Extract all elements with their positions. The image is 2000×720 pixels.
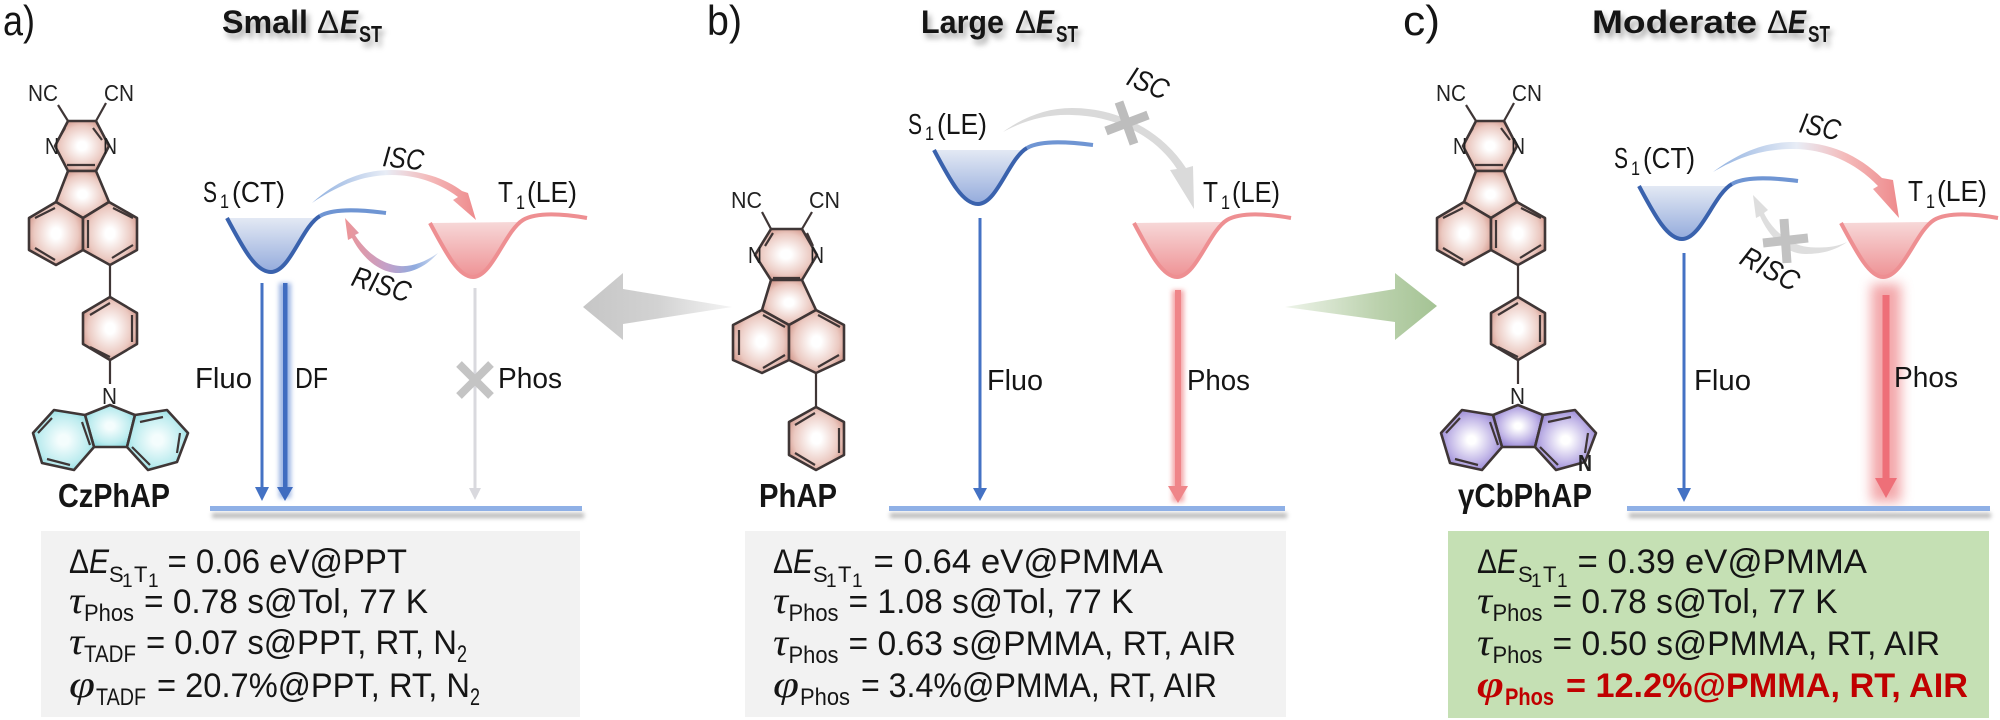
line: TADF quantum yield: 2 — [470, 684, 480, 711]
blocked ISC cross — [1106, 102, 1148, 144]
text: Phos: Phos — [1894, 362, 1958, 394]
heading: large gap: E — [1036, 4, 1055, 40]
heading: large gap: Large — [921, 4, 1004, 40]
line: TADF lifetime — [69, 621, 467, 668]
T1 well — [1134, 214, 1291, 277]
line: lifetime in PMMA: τ — [773, 622, 790, 664]
text: RISC: RISC — [1735, 241, 1805, 299]
line: energy gap: 1 — [148, 571, 159, 592]
delayed fluorescence arrow — [277, 283, 293, 501]
line: energy gap: 1 — [1557, 571, 1568, 592]
line: lifetime in PMMA: Phos — [788, 642, 838, 669]
molecule: gammaCbPhAP: CN — [1512, 80, 1542, 106]
line: lifetime in PMMA: Phos — [1492, 642, 1542, 669]
molecule: PhAP: CN — [809, 187, 840, 213]
heading: small gap — [222, 4, 382, 47]
heading: moderate gap: ST — [1808, 21, 1830, 47]
line: energy gap: 1 — [122, 571, 133, 592]
blocked ISC arrow — [1003, 108, 1194, 209]
text: Fluo: Fluo — [195, 363, 252, 395]
molecule: gammaCbPhAP: N — [1453, 133, 1467, 159]
fluorescence arrow — [1677, 253, 1691, 502]
line: TADF lifetime: TADF — [84, 641, 136, 668]
RISC arrow — [345, 218, 438, 273]
text: RISC: RISC — [348, 261, 416, 310]
molecule: CzPhAP — [28, 80, 188, 470]
molecule: gammaCbPhAP: NC — [1436, 80, 1466, 106]
fluorescence arrow — [973, 218, 987, 501]
text: T1(LE) — [1203, 177, 1280, 214]
molecule: CzPhAP: N — [45, 133, 59, 159]
molecule name: CzPhAP: CzPhAP — [58, 477, 170, 514]
line: energy gap — [773, 543, 1163, 592]
heading: moderate gap — [1592, 4, 1830, 47]
line: lifetime in toluene: Phos — [1492, 600, 1542, 627]
line: energy gap: 1 — [1531, 571, 1542, 592]
molecule: gammaCbPhAP — [1436, 80, 1596, 476]
arrow: grey, to panel a — [583, 273, 732, 340]
line: energy gap: T — [838, 562, 851, 587]
molecule name: gammaCbPhAP: γCbPhAP — [1458, 477, 1592, 514]
text: T1(LE): T — [1908, 176, 1923, 208]
heading: moderate gap: Δ — [1767, 4, 1788, 40]
line: energy gap: 1 — [826, 571, 837, 592]
line: quantum yield, highlighted: Phos — [1505, 684, 1554, 711]
text: S1(CT) — [1614, 143, 1695, 180]
ISC arrow — [1713, 142, 1899, 218]
heading: moderate gap: Moderate — [1592, 4, 1757, 40]
text: S1(CT): (CT) — [232, 177, 285, 209]
line: energy gap: E — [793, 543, 813, 581]
line: lifetime in toluene: τ — [773, 580, 790, 622]
ISC arrow — [312, 170, 476, 220]
line: energy gap: Δ — [1477, 543, 1497, 581]
line: energy gap: 1 — [852, 571, 863, 592]
text: S1(LE): 1 — [925, 124, 934, 145]
line: quantum yield, highlighted — [1477, 664, 1968, 711]
data panel c — [1448, 531, 1989, 718]
heading: large gap — [921, 4, 1078, 47]
line: TADF quantum yield: TADF — [96, 684, 146, 711]
text: T1(LE): (LE) — [1232, 177, 1280, 209]
arrow: green, to panel c — [1285, 273, 1437, 340]
line: TADF quantum yield — [69, 664, 480, 711]
text: DF: DF — [295, 363, 328, 395]
line: energy gap: Δ — [69, 543, 89, 581]
text: T1(LE) — [498, 177, 577, 214]
molecule: CzPhAP: N — [102, 383, 117, 409]
data panel a — [41, 531, 580, 717]
text: S1(CT): (CT) — [1643, 143, 1695, 175]
line: phosphorescence lifetime: = 0.78 s@Tol, 77 K — [144, 583, 428, 621]
line: lifetime in PMMA: τ — [1477, 622, 1494, 664]
line: energy gap: E — [1497, 543, 1517, 581]
text: S1(LE): S — [908, 109, 922, 141]
line: quantum yield: Phos — [800, 684, 850, 711]
text: ISC: ISC — [381, 141, 426, 177]
panel a: energy diagram — [195, 141, 587, 518]
line: quantum yield: φ — [773, 664, 799, 706]
phosphorescence arrow — [1871, 284, 1901, 502]
text: ISC: ISC — [1122, 61, 1174, 107]
heading: small gap: E — [340, 4, 359, 40]
line: lifetime in toluene: = 0.78 s@Tol, 77 K — [1552, 583, 1838, 621]
T1 well — [1841, 214, 1998, 277]
data panel b — [745, 531, 1286, 717]
S1 well — [227, 210, 386, 272]
phosphorescence arrow — [1168, 290, 1188, 503]
line: quantum yield — [773, 664, 1217, 711]
heading: moderate gap: E — [1788, 4, 1807, 40]
text: Phos: Phos — [498, 363, 562, 395]
line: TADF lifetime: 2 — [457, 641, 467, 668]
line: phosphorescence lifetime — [69, 580, 428, 627]
molecule: gammaCbPhAP: N — [1578, 450, 1592, 476]
molecule: CzPhAP: CN — [104, 80, 134, 106]
ground level — [889, 506, 1287, 518]
ground level — [210, 506, 584, 518]
line: TADF lifetime: = 0.07 s@PPT, RT, N — [146, 624, 457, 662]
molecule: CzPhAP: N — [103, 133, 117, 159]
line: energy gap: = 0.64 eV@PMMA — [874, 543, 1163, 581]
text: Phos: Phos — [1187, 365, 1250, 397]
molecule: gammaCbPhAP: N — [1511, 133, 1525, 159]
text: S1(CT): 1 — [1631, 159, 1640, 180]
text: Fluo: Fluo — [987, 365, 1043, 397]
text: S1(LE): (LE) — [937, 109, 987, 141]
heading: large gap: ST — [1056, 21, 1078, 47]
line: energy gap: = 0.06 eV@PPT — [168, 543, 407, 581]
molecule: gammaCbPhAP: N — [1510, 383, 1525, 409]
line: energy gap: = 0.39 eV@PMMA — [1578, 543, 1867, 581]
molecule name: PhAP: PhAP — [759, 477, 837, 514]
text: T1(LE): 1 — [1926, 192, 1935, 213]
line: lifetime in PMMA: = 0.63 s@PMMA, RT, AIR — [848, 625, 1236, 663]
text: S1(CT): S — [1614, 143, 1628, 175]
text: T1(LE): (LE) — [1937, 176, 1987, 208]
line: energy gap — [69, 543, 407, 592]
line: energy gap: E — [89, 543, 109, 581]
molecule: PhAP: N — [748, 242, 762, 268]
line: energy gap: S — [813, 562, 828, 587]
S1 well — [934, 142, 1093, 204]
blocked RISC cross — [1763, 219, 1808, 263]
heading: small gap: ST — [359, 21, 382, 47]
line: lifetime in PMMA — [1477, 622, 1940, 669]
text: T1(LE): T — [498, 177, 513, 209]
text: T1(LE): 1 — [516, 193, 525, 214]
line: energy gap — [1477, 543, 1867, 592]
line: phosphorescence lifetime: Phos — [84, 600, 134, 627]
panel c: energy diagram — [1614, 108, 1998, 518]
heading: large gap: Δ — [1015, 4, 1036, 40]
T1 well — [430, 214, 587, 277]
line: quantum yield: = 3.4%@PMMA, RT, AIR — [861, 667, 1217, 705]
line: quantum yield, highlighted: φ — [1477, 664, 1504, 706]
fluorescence arrow — [255, 283, 269, 501]
line: energy gap: T — [1543, 562, 1556, 587]
line: lifetime in toluene: τ — [1477, 580, 1494, 622]
text: ISC: ISC — [1797, 108, 1844, 148]
line: TADF quantum yield: φ — [69, 664, 95, 706]
line: TADF lifetime: τ — [69, 621, 86, 663]
blocked RISC arrow — [1753, 195, 1847, 254]
text: S1(CT): 1 — [220, 192, 229, 213]
panel b: energy diagram — [889, 61, 1291, 518]
text: T1(LE): T — [1203, 177, 1218, 209]
line: lifetime in PMMA — [773, 622, 1236, 669]
line: lifetime in toluene: Phos — [788, 600, 838, 627]
line: energy gap: S — [109, 562, 124, 587]
text: T1(LE): 1 — [1221, 193, 1230, 214]
heading: small gap: Δ — [317, 4, 339, 40]
text: Fluo: Fluo — [1694, 365, 1751, 397]
suppressed phosphorescence arrow — [459, 288, 491, 500]
line: lifetime in toluene: = 1.08 s@Tol, 77 K — [848, 583, 1134, 621]
text: T1(LE): (LE) — [527, 177, 577, 209]
line: lifetime in PMMA: = 0.50 s@PMMA, RT, AIR — [1552, 625, 1940, 663]
ground level — [1627, 506, 1991, 518]
text: S1(CT) — [203, 177, 285, 213]
text: T1(LE) — [1908, 176, 1987, 213]
text: S1(LE) — [908, 109, 987, 145]
line: energy gap: Δ — [773, 543, 793, 581]
line: energy gap: T — [134, 562, 147, 587]
S1 well — [1639, 178, 1798, 239]
line: quantum yield, highlighted: = 12.2%@PMMA, RT, AIR — [1566, 667, 1968, 705]
line: TADF quantum yield: = 20.7%@PPT, RT, N — [157, 667, 470, 705]
heading: small gap: Small — [222, 4, 308, 40]
molecule: PhAP: N — [810, 242, 824, 268]
line: lifetime in toluene — [773, 580, 1134, 627]
line: energy gap: S — [1518, 562, 1533, 587]
molecule: PhAP — [731, 187, 844, 470]
text: S1(CT): S — [203, 177, 217, 209]
line: phosphorescence lifetime: τ — [69, 580, 86, 622]
line: lifetime in toluene — [1477, 580, 1838, 627]
molecule: CzPhAP: NC — [28, 80, 58, 106]
molecule: PhAP: NC — [731, 187, 762, 213]
